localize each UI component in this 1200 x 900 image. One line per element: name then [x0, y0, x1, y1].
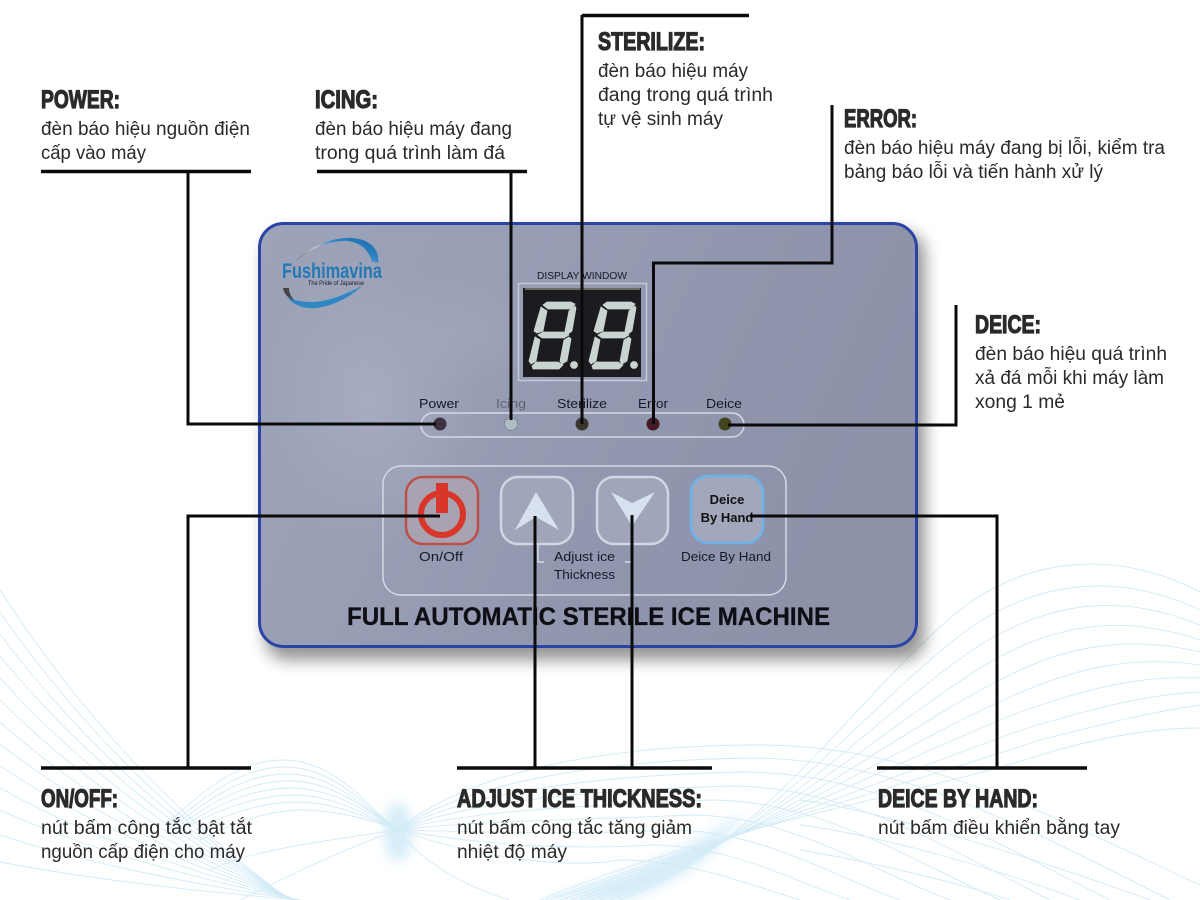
callout: icing: trong quá trình làm đá: [315, 143, 505, 164]
callout: error: bảng báo lỗi và tiến hành xử lý: [844, 161, 1103, 183]
display window: DISPLAY WINDOW: [537, 270, 627, 282]
button: deice by hand: By Hand: [701, 510, 753, 525]
callout: deice: đèn báo hiệu quá trình: [975, 344, 1167, 365]
panel title: FULL AUTOMATIC STERILE ICE MACHINE: [347, 603, 830, 631]
label: adjust ice thickness: Adjust ice: [554, 549, 615, 564]
callout: sterilize: đèn báo hiệu máy: [598, 61, 748, 82]
button: adjust down: [597, 477, 668, 544]
indicator lights row: Icing: [496, 396, 526, 411]
callout: deice: xả đá mỗi khi máy làm: [975, 367, 1164, 389]
button: deice by hand: [681, 476, 771, 564]
callout: sterilize: [582, 15, 773, 424]
button: on/off: On/Off: [419, 549, 463, 564]
button: adjust up: [501, 477, 573, 544]
callout: deice by hand: [750, 516, 1120, 839]
callout: on/off: nguồn cấp điện cho máy: [41, 842, 245, 863]
callout: on/off: [41, 516, 440, 863]
logo: Fushimavina: [282, 238, 382, 308]
background: pale blue wave lines: [0, 564, 1200, 900]
callout: deice: [728, 305, 1167, 425]
callout: adjust ice thickness: [457, 515, 712, 863]
callout: error: [654, 105, 1165, 424]
callout: error: đèn báo hiệu máy đang bị lỗi, kiểm tra: [844, 137, 1165, 159]
callout: deice by hand: DEICE BY HAND:: [878, 785, 1038, 813]
label: adjust ice thickness: [538, 545, 632, 582]
digit 2: [589, 302, 638, 369]
callout: icing: đèn báo hiệu máy đang: [315, 119, 512, 140]
callout: power: cấp vào máy: [41, 143, 146, 164]
display window: [518, 270, 646, 380]
callout: icing: ICING:: [315, 86, 378, 114]
digit 1: [529, 302, 578, 369]
callout: sterilize: STERILIZE:: [598, 28, 705, 56]
indicator lights row: Error: [638, 396, 669, 411]
callout: error: ERROR:: [844, 105, 917, 133]
callout: deice by hand: nút bấm điều khiển bằng tay: [878, 817, 1120, 839]
callout: adjust ice thickness: nhiệt độ máy: [457, 842, 567, 863]
callout: sterilize: đang trong quá trình: [598, 85, 773, 106]
label: adjust ice thickness: Thickness: [554, 567, 616, 582]
logo: Fushimavina: Fushimavina: [282, 260, 382, 283]
indicator lights row: Sterilize: [557, 396, 607, 411]
panel body: [260, 224, 916, 646]
panel highlights: [260, 250, 550, 550]
callout: deice: DEICE:: [975, 311, 1041, 339]
button: deice by hand: Deice By Hand: [681, 549, 771, 564]
callout: adjust ice thickness: nút bấm công tắc tăng giảm: [457, 817, 692, 839]
button: on/off: [406, 477, 478, 564]
indicator lights row: Deice: [706, 396, 742, 411]
callout: icing: [315, 86, 527, 420]
callout: deice: xong 1 mẻ: [975, 392, 1065, 413]
callout: power: [41, 86, 436, 424]
button group: [383, 466, 786, 595]
indicator lights row: Power: [419, 396, 460, 411]
callout: adjust ice thickness: ADJUST ICE THICKNESS:: [457, 785, 702, 813]
control panel: [260, 224, 925, 660]
callout: sterilize: tự vệ sinh máy: [598, 109, 723, 130]
callout: on/off: ON/OFF:: [41, 785, 118, 813]
indicator lights row: [419, 396, 744, 437]
button: deice by hand: Deice: [710, 492, 744, 507]
callout: power: POWER:: [41, 86, 120, 114]
callout: on/off: nút bấm công tắc bật tắt: [41, 817, 253, 839]
callout: power: đèn báo hiệu nguồn điện: [41, 119, 250, 140]
logo: Fushimavina: The Pride of Japanese: [308, 280, 364, 287]
panel shadow: [265, 232, 925, 660]
